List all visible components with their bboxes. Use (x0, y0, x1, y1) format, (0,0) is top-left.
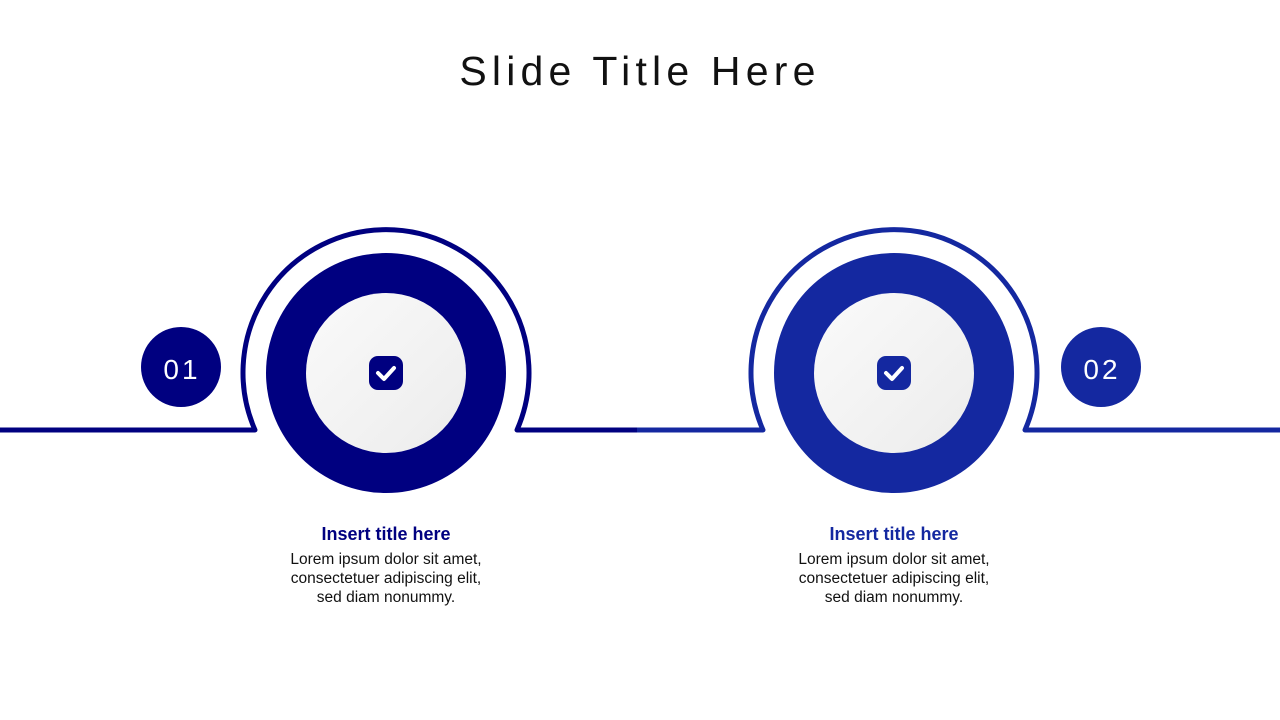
connector line left (0, 230, 637, 430)
badge 01 (141, 327, 221, 407)
step 2 circle (774, 253, 1014, 493)
text block 2: Lorem ipsum dolor sit amet, (798, 551, 990, 568)
text block 2: sed diam nonummy. (825, 589, 963, 606)
badge 02: 02 (1083, 354, 1121, 385)
text block 1: sed diam nonummy. (317, 589, 455, 606)
text block 2 (798, 524, 990, 606)
title: Slide Title Here (459, 48, 821, 94)
text block 1: consectetuer adipiscing elit, (291, 570, 481, 587)
step 1 circle (266, 253, 506, 493)
text block 1: Insert title here (321, 524, 451, 544)
text block 1: Lorem ipsum dolor sit amet, (290, 551, 482, 568)
badge 02 (1061, 327, 1141, 407)
icon: check 1 (369, 356, 403, 390)
text block 1 (290, 524, 482, 606)
text block 2: consectetuer adipiscing elit, (799, 570, 989, 587)
badge 01: 01 (163, 354, 201, 385)
connector line right (637, 230, 1280, 430)
icon: check 2 (877, 356, 911, 390)
text block 2: Insert title here (829, 524, 959, 544)
